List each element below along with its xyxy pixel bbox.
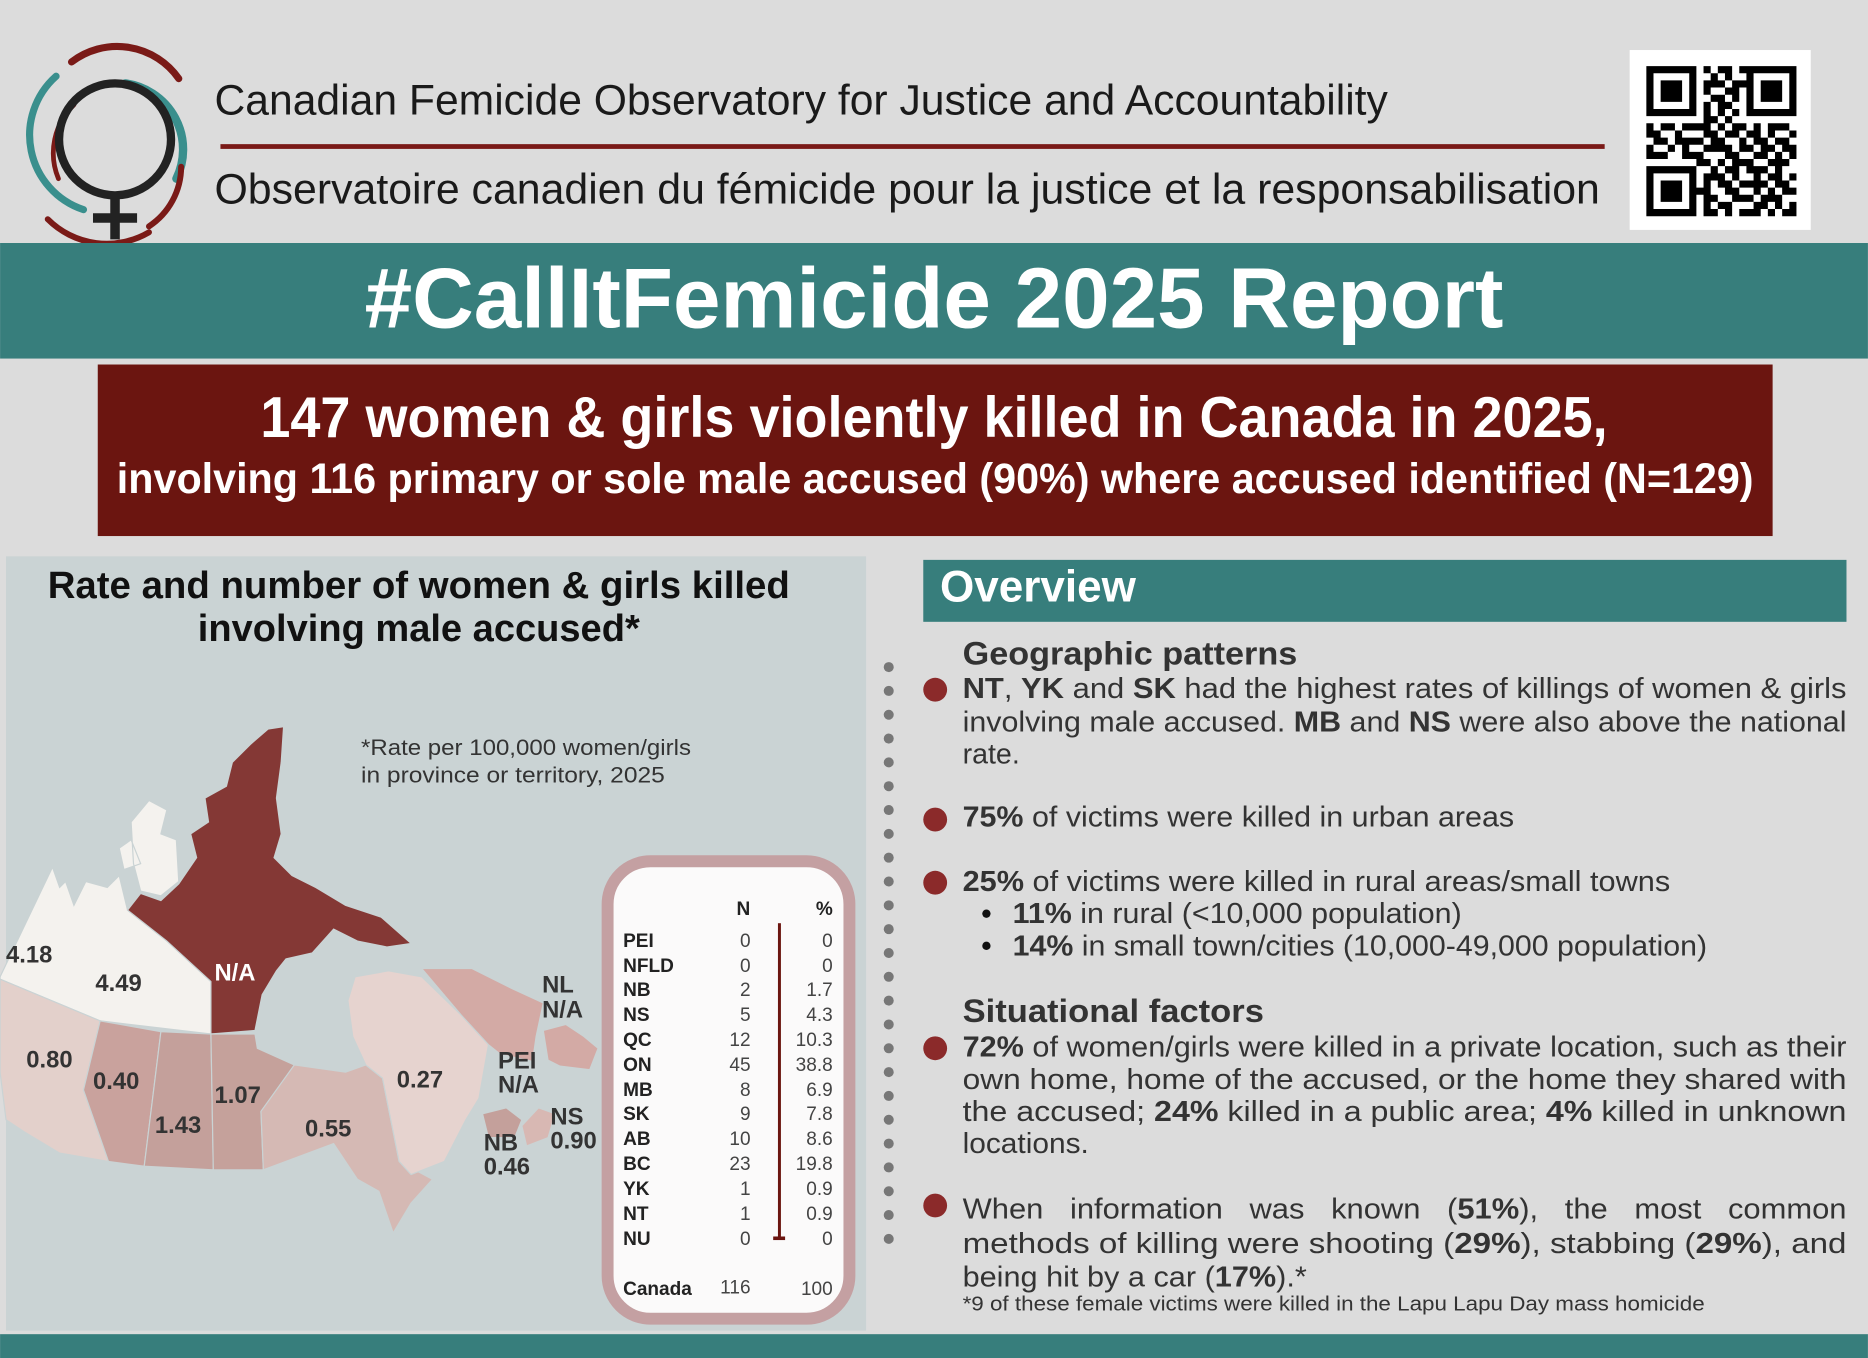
overview: geographic patterns: Geographic patterns <box>963 636 1297 672</box>
table: counts by province: NB <box>623 980 651 1001</box>
map labels: N/A <box>214 959 256 986</box>
title banner <box>0 243 1868 359</box>
map labels: 0.46 <box>484 1154 530 1181</box>
overview: situational factors: 72% of women/girls were killed in a private location, such as their <box>963 1032 1847 1064</box>
header org names <box>214 76 1605 214</box>
key stat box: involving 116 primary or sole male accused (90%) where accused identified (N=129) <box>117 455 1754 503</box>
table: counts by province: 8 <box>740 1080 751 1101</box>
table: counts by province: QC <box>623 1030 652 1051</box>
header org names: Canadian Femicide Observatory for Justice and Accountability <box>214 76 1388 124</box>
table: counts by province: 38.8 <box>796 1055 833 1076</box>
table: counts by province: 0 <box>740 1229 751 1250</box>
map heading: involving male accused* <box>198 608 640 650</box>
table: counts by province: 100 <box>801 1279 833 1300</box>
table: counts by province: 7.8 <box>806 1104 833 1125</box>
key stat box <box>98 365 1773 536</box>
table: counts by province: 45 <box>729 1055 751 1076</box>
overview: situational factors: Situational factors <box>963 993 1264 1029</box>
dotted timeline <box>884 662 894 1244</box>
table: counts by province: MB <box>623 1080 653 1101</box>
map footnote: in province or territory, 2025 <box>361 763 665 788</box>
table: counts by province: N <box>737 899 750 920</box>
map labels: 4.18 <box>6 942 52 969</box>
table: counts by province: 5 <box>740 1005 751 1026</box>
title banner: #CallItFemicide 2025 Report <box>365 251 1503 347</box>
table: counts by province: 1 <box>740 1179 751 1200</box>
table: counts by province: NFLD <box>623 956 674 977</box>
overview: situational factors: When information was known ( 51%), the most common <box>963 1194 1846 1226</box>
table: counts by province: 1 <box>740 1204 751 1225</box>
overview: situational factors: locations. <box>963 1128 1089 1160</box>
overview: geographic patterns: NT, YK and SK had the highest rates of killings of women & girls <box>963 673 1846 705</box>
table: counts by province: BC <box>623 1154 651 1175</box>
table: counts by province: 0.9 <box>806 1204 833 1225</box>
overview: geographic patterns: involving male accused. MB and NS were also above the national <box>963 706 1846 738</box>
map labels: N/A <box>542 996 583 1023</box>
map labels: 0.40 <box>93 1068 139 1095</box>
map labels <box>6 942 597 1181</box>
table: counts by province: 0 <box>822 956 833 977</box>
overview: situational factors: being hit by a car ( 17%).* <box>963 1262 1307 1294</box>
map labels: NS <box>550 1104 584 1131</box>
table: counts by province: 23 <box>729 1154 751 1175</box>
table: counts by province: 12 <box>729 1030 751 1051</box>
map labels: 0.55 <box>305 1115 351 1142</box>
map labels: 0.90 <box>550 1127 597 1154</box>
logo <box>30 46 183 244</box>
table: counts by province: 2 <box>740 980 751 1001</box>
overview: geographic patterns: rate. <box>963 739 1020 771</box>
overview: geographic patterns: 75% of victims were killed in urban areas <box>963 802 1514 834</box>
map labels: N/A <box>498 1071 539 1098</box>
table: counts by province: NU <box>623 1229 651 1250</box>
overview: geographic patterns: 14% in small town/cities (10,000-49,000 population) <box>1013 930 1707 962</box>
table: counts by province: 0 <box>822 1229 833 1250</box>
table: counts by province: PEI <box>623 931 654 952</box>
map labels: 0.27 <box>397 1067 443 1094</box>
overview: situational factors: the accused; 24% killed in a public area; 4% killed in unknown <box>963 1096 1846 1128</box>
table: counts by province: Canada <box>623 1279 692 1300</box>
table: counts by province: 9 <box>740 1104 751 1125</box>
map labels: PEI <box>498 1048 536 1075</box>
map heading <box>48 565 790 650</box>
overview: geographic patterns <box>923 636 1846 962</box>
map of Canada <box>0 727 598 1233</box>
map heading: Rate and number of women & girls killed <box>48 565 790 607</box>
table: counts by province: 4.3 <box>806 1005 833 1026</box>
overview: geographic patterns: 11% in rural (<10,000 population) <box>1013 898 1462 930</box>
table: counts by province: 116 <box>720 1278 751 1299</box>
table: counts by province: 19.8 <box>796 1154 833 1175</box>
map footnote: *Rate per 100,000 women/girls <box>361 735 691 760</box>
panel: map <box>0 556 866 1331</box>
overview header: Overview <box>940 563 1137 612</box>
map labels: 4.49 <box>95 970 142 997</box>
table: counts by province: 10.3 <box>796 1030 833 1051</box>
QR code <box>1630 50 1811 230</box>
table: counts by province: 8.6 <box>806 1129 833 1150</box>
table: counts by province: 0 <box>740 956 751 977</box>
key stat box: 147 women & girls violently killed in Canada in 2025, <box>260 386 1608 450</box>
table: counts by province: 0.9 <box>806 1179 833 1200</box>
map footnote <box>361 735 691 788</box>
table: counts by province: 0 <box>822 931 833 952</box>
table: counts by province: YK <box>623 1179 650 1200</box>
header org names: Observatoire canadien du fémicide pour la justice et la responsabilisation <box>214 166 1600 214</box>
map labels: 1.07 <box>214 1082 261 1109</box>
table: counts by province: % <box>816 899 833 920</box>
overview: situational factors: *9 of these female victims were killed in the Lapu Lapu Day mass homicide <box>963 1293 1705 1315</box>
table: counts by province: 1.7 <box>806 980 833 1001</box>
table: counts by province: ON <box>623 1055 652 1076</box>
table: counts by province: 6.9 <box>806 1080 833 1101</box>
table: counts by province: NS <box>623 1005 650 1026</box>
table: counts by province: 10 <box>729 1129 751 1150</box>
table: counts by province: AB <box>623 1129 651 1150</box>
bottom bar <box>0 1334 1868 1358</box>
map labels: 0.80 <box>26 1046 73 1073</box>
table: counts by province <box>608 861 849 1319</box>
table: counts by province: 0 <box>740 931 751 952</box>
map labels: 1.43 <box>155 1112 201 1139</box>
overview: geographic patterns: 25% of victims were killed in rural areas/small towns <box>963 866 1670 898</box>
table: counts by province: NT <box>623 1204 649 1225</box>
map labels: NL <box>542 971 574 998</box>
table: counts by province: SK <box>623 1104 650 1125</box>
map labels: NB <box>484 1130 518 1157</box>
overview header <box>923 560 1846 622</box>
overview: situational factors: methods of killing were shooting ( 29% ), stabbing ( 29% ), and <box>963 1228 1846 1260</box>
overview: situational factors <box>923 993 1847 1315</box>
overview: situational factors: own home, home of the accused, or the home they shared with <box>963 1064 1846 1096</box>
